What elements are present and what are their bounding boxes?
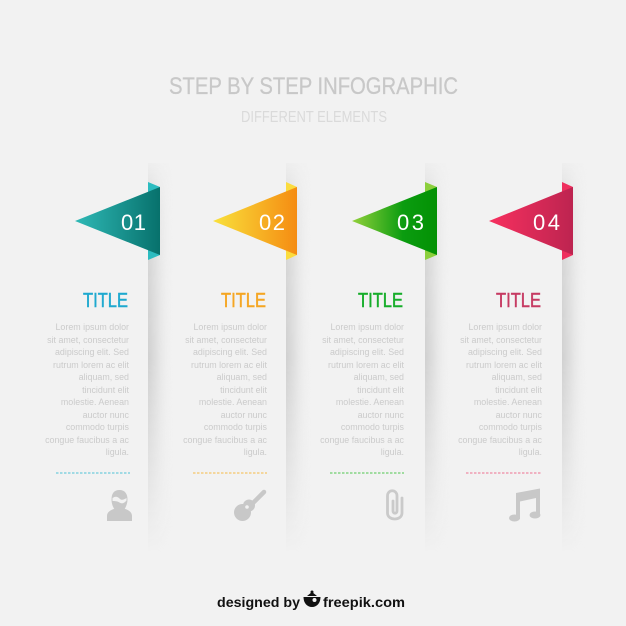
flag 02: 02 — [259, 210, 285, 235]
text block 02: aliquam, sed — [217, 372, 267, 382]
text block 03: sit amet, consectetur — [322, 335, 404, 345]
column shadows — [148, 174, 577, 506]
dashed divider 04 — [466, 472, 541, 474]
text block 04: ligula. — [519, 447, 542, 457]
title: STEP BY STEP INFOGRAPHIC — [169, 73, 458, 100]
text block 01: commodo turpis — [66, 422, 130, 432]
text block 01: Lorem ipsum dolor — [56, 322, 129, 332]
text block 02: auctor nunc — [221, 410, 268, 420]
text block 04 — [458, 322, 543, 457]
text block 04: aliquam, sed — [492, 372, 542, 382]
footer credit: designed by — [217, 594, 300, 610]
icon: guitar — [234, 492, 264, 521]
text block 02: rutrum lorem ac elit — [191, 360, 268, 370]
text block 01: sit amet, consectetur — [47, 335, 129, 345]
text block 04: commodo turpis — [479, 422, 543, 432]
text block 01: tincidunt elit — [82, 385, 130, 395]
text block 04: Lorem ipsum dolor — [468, 322, 542, 332]
icon: paperclip — [388, 491, 402, 519]
text block 03: molestie. Aenean — [336, 397, 404, 407]
footer credit: freepik.com — [323, 594, 405, 610]
text block 01: congue faucibus a ac — [45, 435, 130, 445]
heading 02: TITLE — [221, 290, 266, 312]
flag 02 — [213, 182, 297, 260]
icon: freepik logo — [304, 590, 320, 607]
text block 01: molestie. Aenean — [61, 397, 129, 407]
heading 04: TITLE — [496, 290, 541, 312]
flag 01 — [75, 182, 160, 260]
text block 01 — [45, 322, 130, 457]
panel: step 01 — [45, 182, 160, 521]
text block 02: ligula. — [244, 447, 267, 457]
text block 03: adipiscing elit. Sed — [330, 347, 404, 357]
text block 02: molestie. Aenean — [199, 397, 267, 407]
text block 01: auctor nunc — [83, 410, 130, 420]
text block 02: Lorem ipsum dolor — [194, 322, 267, 332]
text block 03: auctor nunc — [358, 410, 405, 420]
text block 02: congue faucibus a ac — [183, 435, 268, 445]
text block 01: rutrum lorem ac elit — [53, 360, 130, 370]
text block 01: aliquam, sed — [79, 372, 129, 382]
text block 03: congue faucibus a ac — [320, 435, 405, 445]
text block 01: ligula. — [106, 447, 129, 457]
dashed divider 01 — [56, 472, 130, 474]
text block 03: rutrum lorem ac elit — [328, 360, 405, 370]
flag 03 — [352, 182, 437, 260]
subtitle: DIFFERENT ELEMENTS — [241, 109, 387, 126]
dashed divider 03 — [330, 472, 404, 474]
text block 04: rutrum lorem ac elit — [466, 360, 543, 370]
icon: person — [107, 490, 132, 521]
text block 02: adipiscing elit. Sed — [193, 347, 267, 357]
flag 01: 01 — [121, 210, 146, 235]
flag 03: 03 — [397, 210, 424, 235]
text block 03: ligula. — [381, 447, 404, 457]
flag 04 — [489, 182, 573, 260]
panel: step 04 — [458, 182, 573, 522]
text block 04: auctor nunc — [496, 410, 543, 420]
flag 04: 04 — [533, 210, 560, 235]
text block 04: sit amet, consectetur — [460, 335, 542, 345]
heading 01: TITLE — [83, 290, 128, 312]
text block 03 — [320, 322, 405, 457]
text block 02: commodo turpis — [204, 422, 268, 432]
text block 04: molestie. Aenean — [474, 397, 542, 407]
text block 04: adipiscing elit. Sed — [468, 347, 542, 357]
text block 03: aliquam, sed — [354, 372, 404, 382]
text block 02 — [183, 322, 268, 457]
text block 01: adipiscing elit. Sed — [55, 347, 129, 357]
text block 02: sit amet, consectetur — [185, 335, 267, 345]
text block 03: Lorem ipsum dolor — [330, 322, 404, 332]
footer credit — [217, 590, 405, 610]
dashed divider 02 — [193, 472, 267, 474]
icon: music note — [509, 488, 540, 522]
panel: step 02 — [183, 182, 297, 521]
text block 03: tincidunt elit — [357, 385, 405, 395]
heading 03: TITLE — [358, 290, 403, 312]
text block 04: tincidunt elit — [495, 385, 543, 395]
text block 04: congue faucibus a ac — [458, 435, 543, 445]
text block 02: tincidunt elit — [220, 385, 268, 395]
text block 03: commodo turpis — [341, 422, 405, 432]
panel: step 03 — [320, 182, 437, 519]
